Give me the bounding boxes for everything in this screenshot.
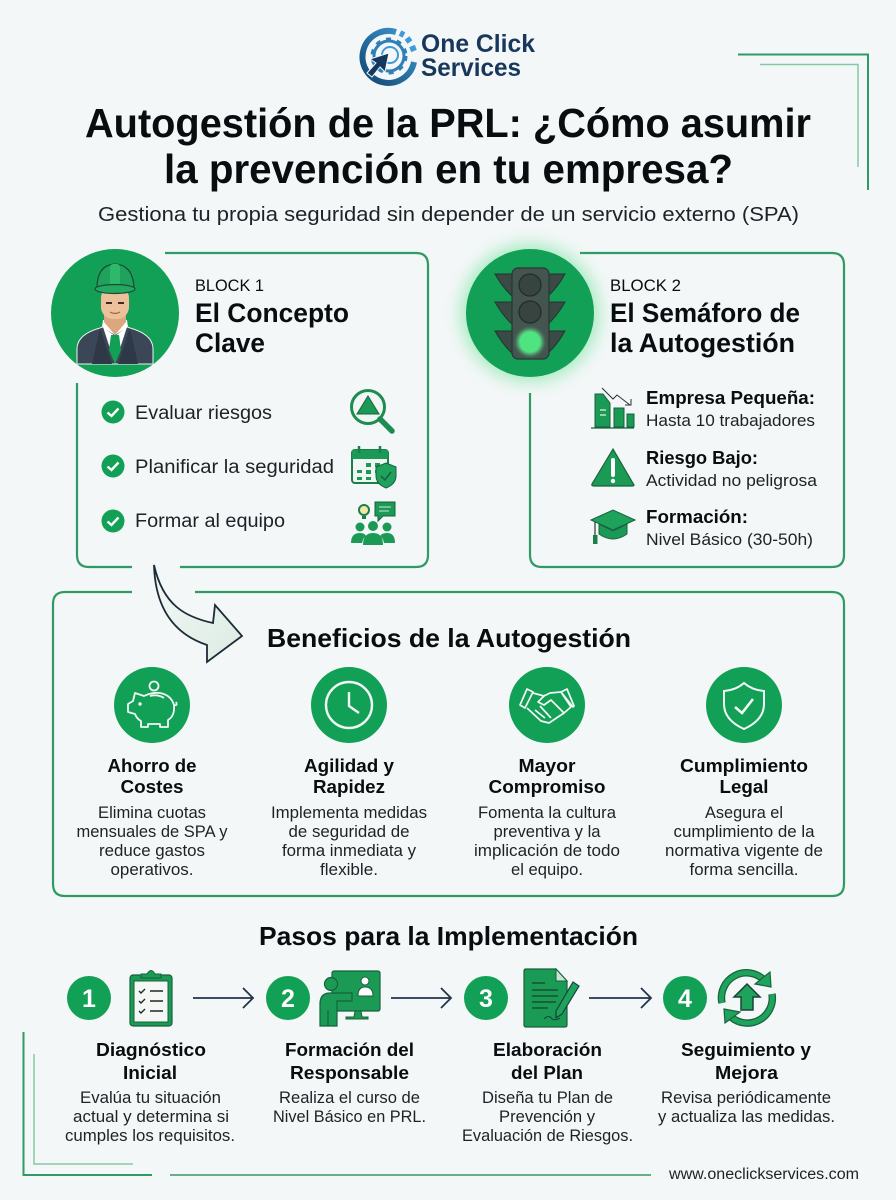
text: riesgo bajo bbox=[646, 448, 818, 490]
benefit: mayor compromiso bbox=[474, 667, 620, 879]
title: Autogestión de la PRL: ¿Cómo asumir bbox=[85, 100, 811, 146]
heading: block 2: la Autogestión bbox=[610, 328, 795, 358]
icon: magnifier with warning bbox=[352, 390, 392, 431]
arrow: step 2 to 3 bbox=[391, 988, 451, 1008]
benefit: agilidad y rapidez: Agilidad y bbox=[304, 756, 394, 776]
checklist item: evaluar riesgos: Evaluar riesgos bbox=[135, 403, 272, 424]
step 3: elaboracion: Elaboración bbox=[493, 1040, 602, 1060]
subtitle: Gestiona tu propia seguridad sin depender de un servicio externo (SPA) bbox=[98, 203, 799, 226]
step 3: elaboracion: Prevención y bbox=[499, 1108, 596, 1126]
panel: benefits bbox=[53, 592, 844, 896]
benefit: mayor compromiso: Compromiso bbox=[488, 777, 606, 797]
text: empresa pequena bbox=[646, 388, 815, 430]
heading: pasos: Pasos para la Implementación bbox=[259, 921, 638, 951]
text: formacion: Nivel Básico (30-50h) bbox=[646, 531, 813, 549]
step 2: formacion: Realiza el curso de bbox=[279, 1089, 420, 1107]
benefit: ahorro de costes: Elimina cuotas bbox=[98, 804, 206, 822]
title: la prevención en tu empresa? bbox=[164, 146, 733, 192]
arrow: curved from block 1 to benefits bbox=[154, 565, 242, 662]
step 3: elaboracion: Diseña tu Plan de bbox=[482, 1089, 613, 1107]
step 2: formacion: Nivel Básico en PRL. bbox=[273, 1108, 426, 1126]
benefit: cumplimiento legal: normativa vigente de bbox=[665, 842, 823, 860]
step 1: diagnostico: cumples los requisitos. bbox=[65, 1127, 235, 1145]
benefit: agilidad y rapidez: flexible. bbox=[320, 861, 378, 879]
benefit: cumplimiento legal: Cumplimiento bbox=[680, 756, 808, 776]
benefit: cumplimiento legal: cumplimiento de la bbox=[674, 823, 815, 841]
text: riesgo bajo: Actividad no peligrosa bbox=[646, 472, 818, 490]
text: formacion bbox=[646, 507, 813, 549]
heading: beneficios: Beneficios de la Autogestión bbox=[267, 623, 631, 653]
step 4: seguimiento: y actualiza las medidas. bbox=[658, 1108, 835, 1126]
benefit: ahorro de costes: Ahorro de bbox=[108, 756, 196, 776]
step 3: elaboracion: 3 bbox=[479, 985, 493, 1013]
benefit: ahorro de costes bbox=[76, 667, 228, 879]
text: riesgo bajo: Riesgo Bajo: bbox=[646, 448, 758, 468]
benefit: agilidad y rapidez: de seguridad de bbox=[288, 823, 410, 841]
benefit: mayor compromiso: Fomenta la cultura bbox=[478, 804, 617, 822]
icon: presenter at screen bbox=[320, 971, 380, 1026]
icon: team with idea bbox=[351, 502, 395, 545]
icon: handshake bbox=[520, 689, 574, 723]
step 1: diagnostico: actual y determina si bbox=[73, 1108, 229, 1126]
step 4: seguimiento: Seguimiento y bbox=[681, 1040, 811, 1060]
benefit: mayor compromiso: preventiva y la bbox=[494, 823, 601, 841]
step 3: elaboracion bbox=[462, 969, 633, 1145]
step 2: formacion: Responsable bbox=[290, 1063, 409, 1083]
step 1: diagnostico bbox=[65, 970, 235, 1145]
logo: One Click Services: One Click bbox=[421, 30, 535, 58]
step 1: diagnostico: 1 bbox=[82, 985, 96, 1013]
benefit: ahorro de costes: mensuales de SPA y bbox=[76, 823, 228, 841]
icon: calendar with shield bbox=[352, 446, 396, 488]
step 1: diagnostico: Diagnóstico bbox=[96, 1040, 206, 1060]
benefit: cumplimiento legal: Legal bbox=[720, 777, 768, 797]
heading: block 2: El Semáforo de bbox=[610, 298, 800, 328]
step 3: elaboracion: Evaluación de Riesgos. bbox=[462, 1127, 633, 1145]
step 2: formacion bbox=[266, 971, 426, 1126]
benefit: ahorro de costes: operativos. bbox=[110, 861, 194, 879]
icon: piggy bank bbox=[128, 682, 177, 727]
icon: shield check bbox=[724, 683, 764, 729]
step 4: seguimiento: Mejora bbox=[715, 1063, 779, 1083]
checklist item: evaluar riesgos bbox=[102, 400, 272, 424]
benefit: agilidad y rapidez bbox=[271, 667, 427, 879]
icon: clock bbox=[326, 682, 372, 728]
step 4: seguimiento: Revisa periódicamente bbox=[661, 1089, 831, 1107]
benefit: ahorro de costes: reduce gastos bbox=[99, 842, 205, 860]
heading: block 1: BLOCK 1 bbox=[195, 276, 264, 295]
benefit: agilidad y rapidez: Rapidez bbox=[313, 777, 385, 797]
icon: clipboard bbox=[130, 970, 172, 1026]
arrow: step 3 to 4 bbox=[589, 988, 651, 1008]
benefit: mayor compromiso: Mayor bbox=[518, 756, 576, 776]
step 3: elaboracion: del Plan bbox=[511, 1063, 583, 1083]
icon: traffic light bbox=[462, 245, 598, 381]
benefit: mayor compromiso: implicación de todo bbox=[474, 842, 620, 860]
title bbox=[85, 100, 811, 192]
logo: One Click Services: Services bbox=[421, 54, 521, 82]
step 2: formacion: Formación del bbox=[285, 1040, 414, 1060]
heading: block 2 bbox=[610, 276, 800, 358]
benefit: agilidad y rapidez: Implementa medidas bbox=[271, 804, 427, 822]
icon: warning triangle bbox=[592, 449, 634, 486]
heading: block 2: BLOCK 2 bbox=[610, 276, 681, 295]
icon: engineer portrait bbox=[51, 249, 179, 377]
heading: block 1: El Concepto bbox=[195, 298, 349, 328]
step 4: seguimiento: 4 bbox=[678, 985, 692, 1013]
icon: document and pen bbox=[524, 969, 579, 1027]
text: empresa pequena: Hasta 10 trabajadores bbox=[646, 412, 815, 430]
benefit: cumplimiento legal: Asegura el bbox=[705, 804, 783, 822]
text: formacion: Formación: bbox=[646, 507, 748, 527]
benefit: cumplimiento legal: forma sencilla. bbox=[690, 861, 798, 879]
logo: One Click Services bbox=[363, 30, 535, 83]
icon: small company chart bbox=[591, 388, 634, 428]
footer url: www.oneclickservices.com bbox=[668, 1166, 859, 1183]
checklist item: formar: Formar al equipo bbox=[135, 511, 285, 532]
step 1: diagnostico: Evalúa tu situación bbox=[80, 1089, 221, 1107]
benefit: agilidad y rapidez: forma inmediata y bbox=[282, 842, 417, 860]
step 1: diagnostico: Inicial bbox=[123, 1063, 177, 1083]
panel: block 2 traffic light bbox=[462, 245, 844, 567]
heading: block 1 bbox=[195, 276, 349, 358]
icon: gear and cursor bbox=[363, 31, 414, 83]
checklist item: planificar: Planificar la seguridad bbox=[135, 457, 334, 478]
icon: refresh with up arrow bbox=[721, 972, 772, 1023]
benefit: cumplimiento legal bbox=[665, 667, 823, 879]
panel: block 1 concept bbox=[51, 249, 428, 567]
benefit: ahorro de costes: Costes bbox=[120, 777, 184, 797]
arrow: step 1 to 2 bbox=[193, 988, 253, 1008]
step 4: seguimiento bbox=[658, 972, 835, 1126]
heading: block 1: Clave bbox=[195, 328, 265, 358]
benefit: mayor compromiso: el equipo. bbox=[511, 861, 583, 879]
icon: graduation cap bbox=[591, 510, 635, 544]
step 2: formacion: 2 bbox=[281, 985, 295, 1013]
text: empresa pequena: Empresa Pequeña: bbox=[646, 388, 815, 408]
